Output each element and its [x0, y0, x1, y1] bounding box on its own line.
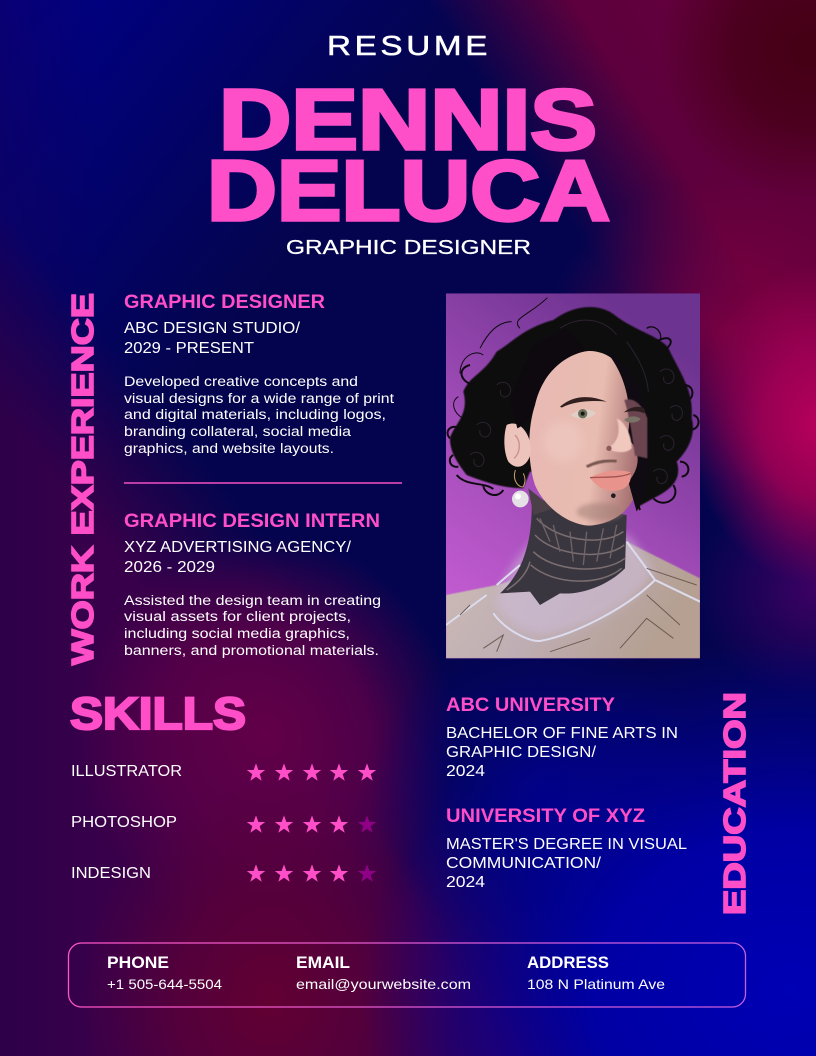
job: graphic designer: 2029 - PRESENT — [124, 340, 254, 357]
skill: photoshop: PHOTOSHOP — [71, 814, 177, 831]
face — [529, 351, 646, 526]
panel: work experience — [124, 292, 402, 658]
contact: email — [296, 954, 471, 992]
skill: illustrator: ILLUSTRATOR — [71, 763, 182, 780]
hair over temple — [516, 351, 586, 428]
school: university of xyz: 2024 — [446, 874, 485, 891]
skill: illustrator — [71, 763, 376, 781]
school: university of xyz — [446, 806, 687, 891]
job: graphic designer: visual designs for a wide range of print — [124, 391, 394, 406]
earring — [514, 470, 525, 487]
school: abc university: GRAPHIC DESIGN/ — [446, 744, 597, 761]
job: graphic designer: and digital materials, including logos, — [124, 407, 386, 422]
school: abc university: BACHELOR OF FINE ARTS IN — [446, 725, 678, 742]
job: graphic designer: GRAPHIC DESIGNER — [124, 292, 325, 313]
contact: address — [527, 954, 665, 992]
neck — [500, 498, 627, 605]
garment — [446, 542, 700, 658]
contact: phone — [107, 954, 222, 992]
school: university of xyz: UNIVERSITY OF XYZ — [446, 806, 645, 827]
job: graphic designer: branding collateral, social media — [124, 424, 352, 439]
skill: indesign: INDESIGN — [71, 865, 151, 882]
panel: skills — [71, 763, 376, 882]
title: name: DELUCA — [207, 144, 610, 239]
eyebrows and eyes — [560, 397, 607, 408]
contact: address: ADDRESS — [527, 954, 609, 972]
nose — [610, 418, 632, 452]
job: graphic design intern — [124, 511, 381, 658]
lips — [590, 471, 631, 491]
ear — [504, 423, 531, 467]
stubble — [587, 461, 617, 467]
job: graphic design intern: GRAPHIC DESIGN INTERN — [124, 511, 380, 532]
school: university of xyz: COMMUNICATION/ — [446, 855, 602, 872]
subtitle: job title: GRAPHIC DESIGNER — [286, 237, 531, 259]
job: graphic designer: Developed creative concepts and — [124, 374, 358, 389]
title: name: DENNIS — [219, 73, 597, 168]
skill: photoshop — [71, 814, 376, 833]
panel: education — [446, 695, 687, 891]
contact: email: EMAIL — [296, 954, 350, 972]
heading: education: EDUCATION — [717, 692, 752, 915]
photo: portrait — [446, 293, 700, 658]
hair curls — [448, 298, 699, 510]
job: graphic designer: ABC DESIGN STUDIO/ — [124, 320, 301, 337]
hair falling over right brow — [611, 358, 645, 512]
job: graphic design intern: banners, and promotional materials. — [124, 643, 379, 658]
contact: email: email@yourwebsite.com — [296, 976, 471, 992]
label: resume: RESUME — [327, 30, 491, 61]
school: abc university — [446, 695, 678, 780]
job: graphic designer: graphics, and website layouts. — [124, 441, 334, 456]
hair back — [450, 307, 693, 507]
strap — [446, 542, 700, 641]
contact: phone: +1 505-644-5504 — [107, 976, 222, 992]
heading: work experience: WORK EXPERIENCE — [65, 293, 100, 665]
contact: address: 108 N Platinum Ave — [527, 976, 665, 992]
job: graphic design intern: XYZ ADVERTISING AGENCY/ — [124, 539, 352, 556]
school: university of xyz: MASTER'S DEGREE IN VISUAL — [446, 836, 687, 853]
garment tattoo lines — [460, 568, 697, 652]
contact: phone: PHONE — [107, 954, 169, 972]
job: graphic design intern: Assisted the design team in creating — [124, 593, 381, 608]
heading: skills: SKILLS — [70, 688, 246, 739]
job: graphic design intern: 2026 - 2029 — [124, 559, 215, 576]
job: graphic designer — [124, 292, 394, 456]
job: graphic design intern: including social media graphics, — [124, 626, 350, 641]
title: name — [207, 73, 610, 239]
skill: indesign — [71, 864, 376, 882]
school: abc university: 2024 — [446, 763, 485, 780]
panel: contact — [68, 943, 746, 1007]
job: graphic design intern: visual assets for client projects, — [124, 609, 351, 624]
cheek highlight — [548, 427, 578, 457]
school: abc university: ABC UNIVERSITY — [446, 695, 615, 716]
